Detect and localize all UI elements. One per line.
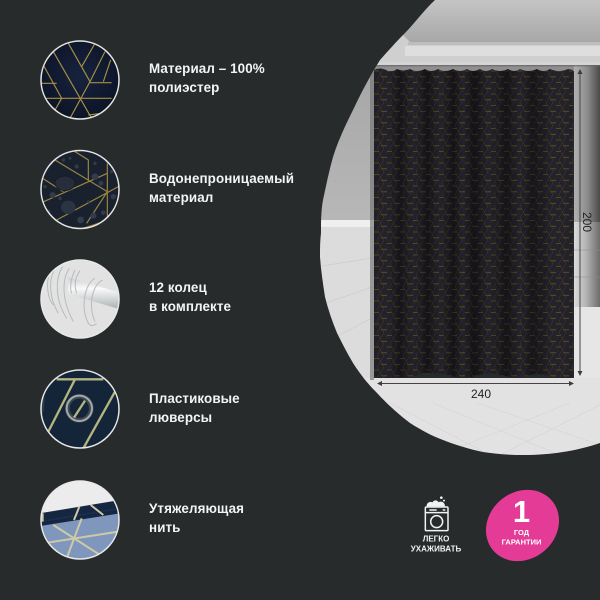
badge: 1 year warranty (471, 475, 574, 576)
label: 240: 240 (471, 387, 491, 401)
curtain (374, 66, 573, 381)
badge: 1 year warranty: ГАРАНТИИ (502, 538, 541, 546)
wall right (574, 65, 600, 225)
care label: УХАЖИВАТЬ (411, 544, 461, 554)
care label (411, 534, 461, 554)
text: material (149, 61, 265, 95)
text: weighted thread (149, 501, 244, 534)
icon: fabric pattern circle (40, 40, 120, 120)
text: rings: 12 колец (149, 280, 207, 295)
text: grommets: люверсы (149, 410, 212, 424)
icon: water drops circle (40, 150, 120, 230)
text: waterproof (149, 171, 294, 205)
text: rings: в комплекте (149, 298, 231, 314)
photo: bathroom with curtain (310, 0, 600, 460)
icon: curtain rings circle (40, 259, 120, 339)
badge: 1 year warranty: ГОД (514, 528, 530, 537)
icon: grommet circle (40, 369, 120, 449)
wall left (321, 70, 374, 224)
text: weighted thread: нить (149, 520, 181, 534)
badge: 1 year warranty: 1 (513, 494, 530, 529)
dimension arrow: height 200 (578, 69, 582, 376)
text: weighted thread: Утяжеляющая (149, 501, 244, 516)
shower rod (376, 65, 600, 66)
icon: weighted hem circle (40, 480, 120, 563)
left wainscot tiles (320, 220, 374, 390)
text: material: Материал – 100% (149, 61, 265, 76)
text: rings (149, 280, 231, 314)
bathtub (574, 307, 600, 378)
text: waterproof: материал (149, 190, 213, 204)
text: material: полиэстер (149, 80, 219, 94)
ceiling (394, 0, 600, 45)
icon: washing machine (425, 496, 448, 531)
right tiles (574, 222, 600, 307)
text: waterproof: Водонепроницаемый (149, 171, 294, 186)
cornice (376, 34, 600, 65)
text: grommets (149, 391, 240, 425)
care label: ЛЕГКО (423, 534, 449, 544)
text: grommets: Пластиковые (149, 391, 240, 406)
dimension arrow: width 240 (377, 381, 574, 386)
floor (364, 378, 600, 455)
label: 200: 200 (580, 212, 594, 232)
curtain liner edge (370, 70, 374, 380)
